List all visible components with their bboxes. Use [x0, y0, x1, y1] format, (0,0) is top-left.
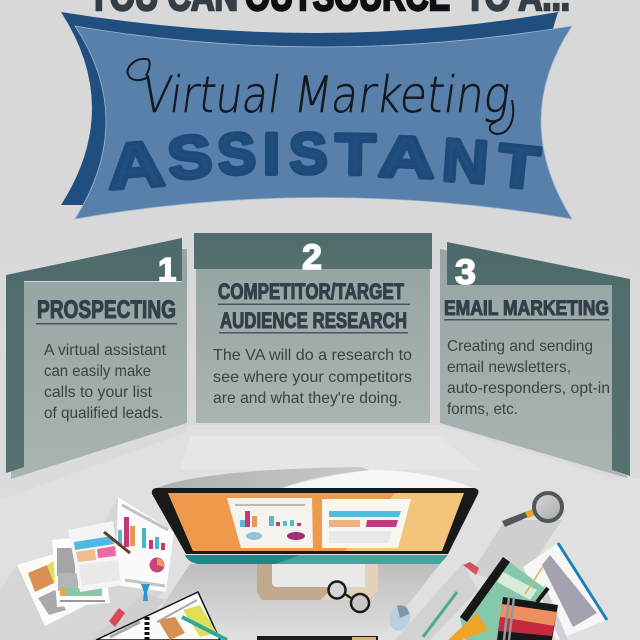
- icon: glasses: [328, 582, 369, 612]
- icon: red marker: [109, 608, 125, 627]
- book: white blue edged: [523, 543, 607, 640]
- banner script heading: [127, 59, 515, 134]
- body text 3: email newsletters,: [447, 359, 571, 376]
- book: green notebook: [460, 557, 548, 640]
- icon: pencil on papers: [104, 532, 130, 553]
- heading: prospecting: PROSPECTING: [37, 296, 176, 324]
- banner script heading: Virtual: [138, 65, 285, 124]
- panel 1 header fold: [6, 238, 182, 473]
- icon: green pencil: [423, 592, 457, 637]
- number 2: 2: [302, 238, 322, 277]
- panel: email marketing: [440, 242, 630, 478]
- body text 1: can easily make: [44, 363, 151, 380]
- body text 1: calls to your list: [44, 384, 153, 401]
- heading: competitor/target: COMPETITOR/TARGET: [218, 279, 404, 304]
- banner ASSISTANT lettering: T: [335, 122, 376, 188]
- monitor bezel: [152, 488, 479, 554]
- panel: competitor research: [194, 233, 432, 423]
- long shadows: [0, 497, 165, 640]
- body text 2: [213, 347, 412, 407]
- heading: audience research: AUDIENCE RESEARCH: [220, 308, 407, 333]
- body text 3: auto-responders, opt-in: [447, 380, 610, 397]
- floor highlight: [0, 425, 640, 640]
- sheet C: [68, 521, 122, 592]
- sheet B: [52, 535, 110, 607]
- body text 1: A virtual assistant: [44, 342, 167, 359]
- open notebook: [96, 592, 227, 640]
- sheet A: [17, 553, 90, 626]
- panel: prospecting: [6, 238, 187, 479]
- monitor stand: [257, 564, 378, 600]
- sheet D: [115, 497, 174, 592]
- banner ASSISTANT lettering: I: [263, 122, 280, 187]
- desk illustration: [0, 488, 607, 640]
- book: dark stripe notebook: [497, 565, 558, 640]
- body text 3: Creating and sending: [447, 338, 593, 355]
- monitor: [152, 488, 479, 600]
- body text 2: see where your competitors: [213, 369, 412, 386]
- body text 3: [447, 338, 610, 418]
- icon: red marker right: [463, 562, 479, 575]
- body text 2: The VA will do a research to: [213, 347, 412, 364]
- panel 3 header fold: [447, 242, 630, 476]
- screen document left: [227, 498, 313, 548]
- banner ASSISTANT lettering: S: [164, 122, 215, 193]
- title: [88, 0, 570, 19]
- icon: blue pin: [141, 584, 150, 601]
- banner script heading: Marketing: [290, 65, 515, 124]
- banner ASSISTANT lettering: [105, 120, 542, 203]
- number 3: 3: [455, 253, 476, 292]
- banner ASSISTANT lettering: A: [378, 124, 436, 191]
- banner ASSISTANT lettering: N: [440, 126, 491, 196]
- body text 2: are and what they're doing.: [213, 390, 402, 407]
- monitor chin: [185, 555, 448, 564]
- icon: keyboard: [257, 636, 378, 640]
- banner back ribbon: [61, 12, 558, 205]
- icon: mouse: [386, 602, 414, 634]
- icon: orange highlighter: [448, 613, 488, 640]
- body text 1: [44, 342, 167, 422]
- banner ASSISTANT lettering: A: [105, 127, 167, 203]
- screen document right: [322, 499, 411, 548]
- monitor arc shadow: [152, 467, 370, 490]
- documents left: [17, 497, 174, 626]
- number 1: 1: [158, 251, 176, 288]
- monitor screen: [168, 493, 464, 551]
- heading: email marketing: EMAIL MARKETING: [444, 297, 609, 320]
- body text 1: of qualified leads.: [44, 405, 163, 422]
- banner: [61, 12, 572, 219]
- icon: magnifier: [502, 493, 562, 527]
- banner ASSISTANT lettering: S: [288, 121, 328, 187]
- body text 3: forms, etc.: [447, 401, 518, 418]
- banner ASSISTANT lettering: T: [495, 131, 542, 202]
- panel 2 header: [194, 233, 432, 269]
- banner ASSISTANT lettering: S: [215, 120, 258, 188]
- banner front: [75, 26, 572, 219]
